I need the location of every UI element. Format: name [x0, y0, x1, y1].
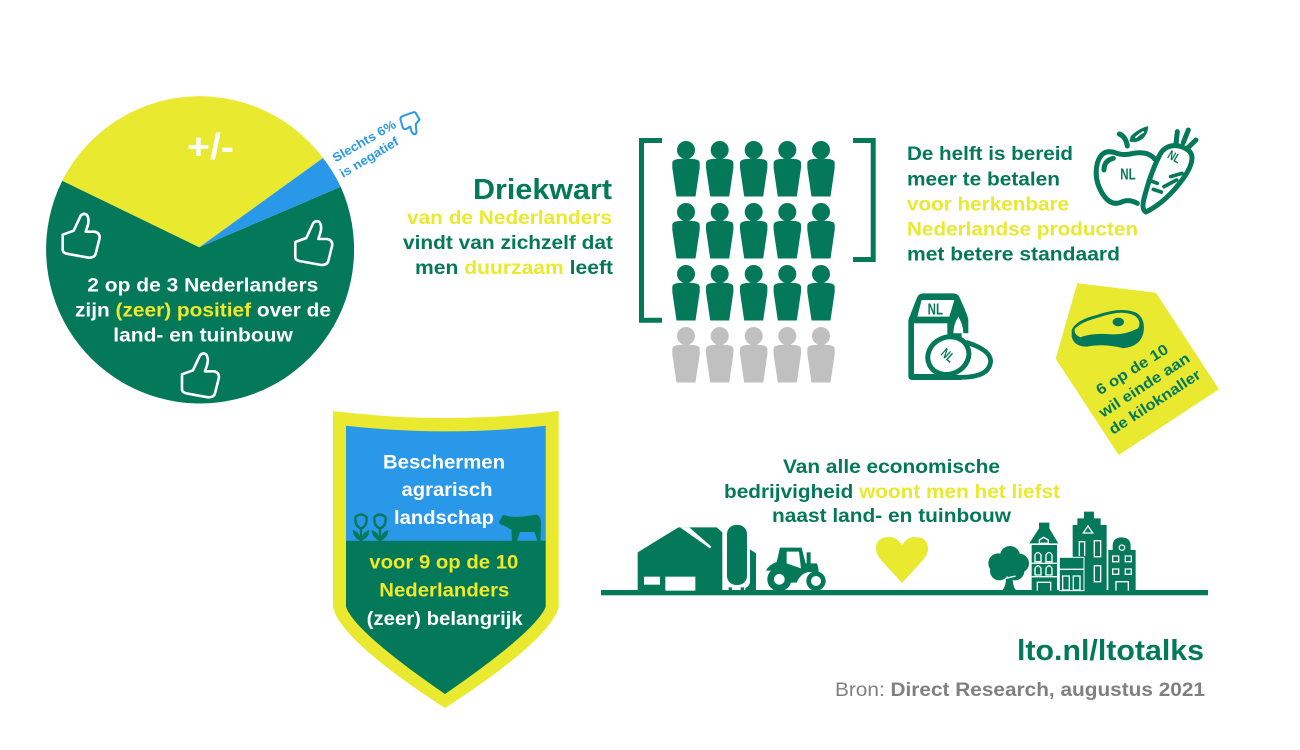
shield text: [367, 451, 523, 630]
shield text: (zeer) belangrijk: [367, 608, 523, 630]
shield text: landschap: [394, 507, 494, 529]
panel: shield landscape: [333, 411, 559, 708]
shield text: Nederlanders: [379, 580, 509, 602]
shield text: Beschermen: [383, 451, 505, 473]
text block: living next to agriculture: Van alle economische: [783, 456, 1000, 478]
bracket right: [853, 140, 873, 260]
people: grey row: [672, 327, 835, 382]
panel: opinion pie chart: [46, 96, 425, 403]
text block: half willing to pay: met betere standaard: [907, 244, 1120, 266]
text block: half willing to pay: De helft is bereid: [907, 143, 1073, 165]
icon: farm and tractor: [638, 525, 823, 591]
text block: half willing to pay: [907, 143, 1138, 266]
text block: half willing to pay: meer te betalen: [907, 169, 1060, 191]
label: neutral: +/-: [187, 126, 234, 167]
low house: [1059, 557, 1084, 591]
text block: living next to agriculture: naast land- en tuinbouw: [772, 505, 1012, 527]
shield text: voor 9 op de 10: [369, 551, 518, 573]
pie slice: positive: [46, 181, 354, 403]
tag text: [1093, 341, 1204, 438]
icon: milk carton and eggs: [908, 293, 991, 381]
website link: lto.nl/ltotalks: [1017, 635, 1204, 667]
carrot: [1143, 130, 1196, 212]
callout: negative share: is negatief: [337, 134, 402, 181]
pie text: [75, 275, 331, 347]
icon: apple and carrot: NL: [1165, 149, 1183, 167]
tag text: de kiloknaller: [1106, 366, 1204, 438]
egg back: [940, 343, 991, 377]
tag text: 6 op de 10: [1093, 341, 1172, 399]
panel: price tag: [1056, 283, 1219, 455]
icon: tree and town: [988, 512, 1136, 591]
pie text: zijn (zeer) positief over de: [75, 300, 331, 322]
bracket left: [642, 140, 662, 320]
tag shape: [1056, 283, 1219, 455]
field: [346, 541, 546, 694]
icon: thumb up left: [63, 214, 100, 258]
text block: living next to agriculture: [724, 456, 1061, 527]
carton label: NL: [928, 301, 943, 318]
tree: [988, 546, 1029, 591]
text block: half willing to pay: Nederlandse producten: [907, 219, 1138, 241]
sky: [346, 426, 546, 541]
icon: steak: [1072, 310, 1144, 348]
pie slice: neutral: [62, 96, 323, 247]
shield border: [333, 411, 559, 708]
shield text: agrarisch: [402, 479, 492, 501]
text block: three quarters: Driekwart: [473, 174, 612, 206]
silo: [727, 525, 756, 591]
text block: living next to agriculture: bedrijvigheid woont men het liefst: [724, 481, 1061, 503]
icon: cow: [499, 514, 541, 541]
icon: thumb up right: [295, 221, 332, 265]
callout: negative share: Slechts 6%: [330, 117, 398, 165]
icon: thumb up bottom: [182, 354, 219, 397]
text block: three quarters: vindt van zichzelf dat: [403, 232, 614, 254]
pie slice: negative: [199, 158, 341, 247]
text block: three quarters: [403, 174, 614, 279]
text block: three quarters: van de Nederlanders: [407, 207, 612, 229]
tall stepped gable house: [1073, 512, 1107, 591]
pie text: 2 op de 3 Nederlanders: [87, 275, 318, 297]
text block: half willing to pay: voor herkenbare: [907, 194, 1069, 216]
egg front: [922, 330, 975, 381]
text block: three quarters: men duurzaam leeft: [415, 257, 614, 279]
carton: [908, 293, 968, 380]
icon: apple and carrot: NL: [1120, 166, 1136, 183]
small gable house: [1108, 537, 1136, 591]
icon: heart: [876, 537, 928, 583]
chart: people pictogram: [642, 140, 873, 382]
ground line: [601, 590, 1208, 595]
barn: [638, 527, 722, 591]
house with spire: [1029, 523, 1058, 591]
icon: thumb down: [398, 110, 425, 138]
source: Bron: Direct Research, augustus 2021: [835, 680, 1205, 701]
tag text: wil einde aan: [1095, 350, 1193, 422]
pie text: land- en tuinbouw: [113, 325, 294, 347]
people: green rows: [672, 141, 835, 320]
icon: tulips: [353, 514, 388, 541]
tractor: [766, 548, 823, 588]
apple: [1096, 127, 1155, 203]
icon: apple and carrot: [1096, 127, 1196, 212]
icon: milk carton and eggs: NL: [938, 346, 957, 366]
callout: negative share: [330, 117, 402, 181]
